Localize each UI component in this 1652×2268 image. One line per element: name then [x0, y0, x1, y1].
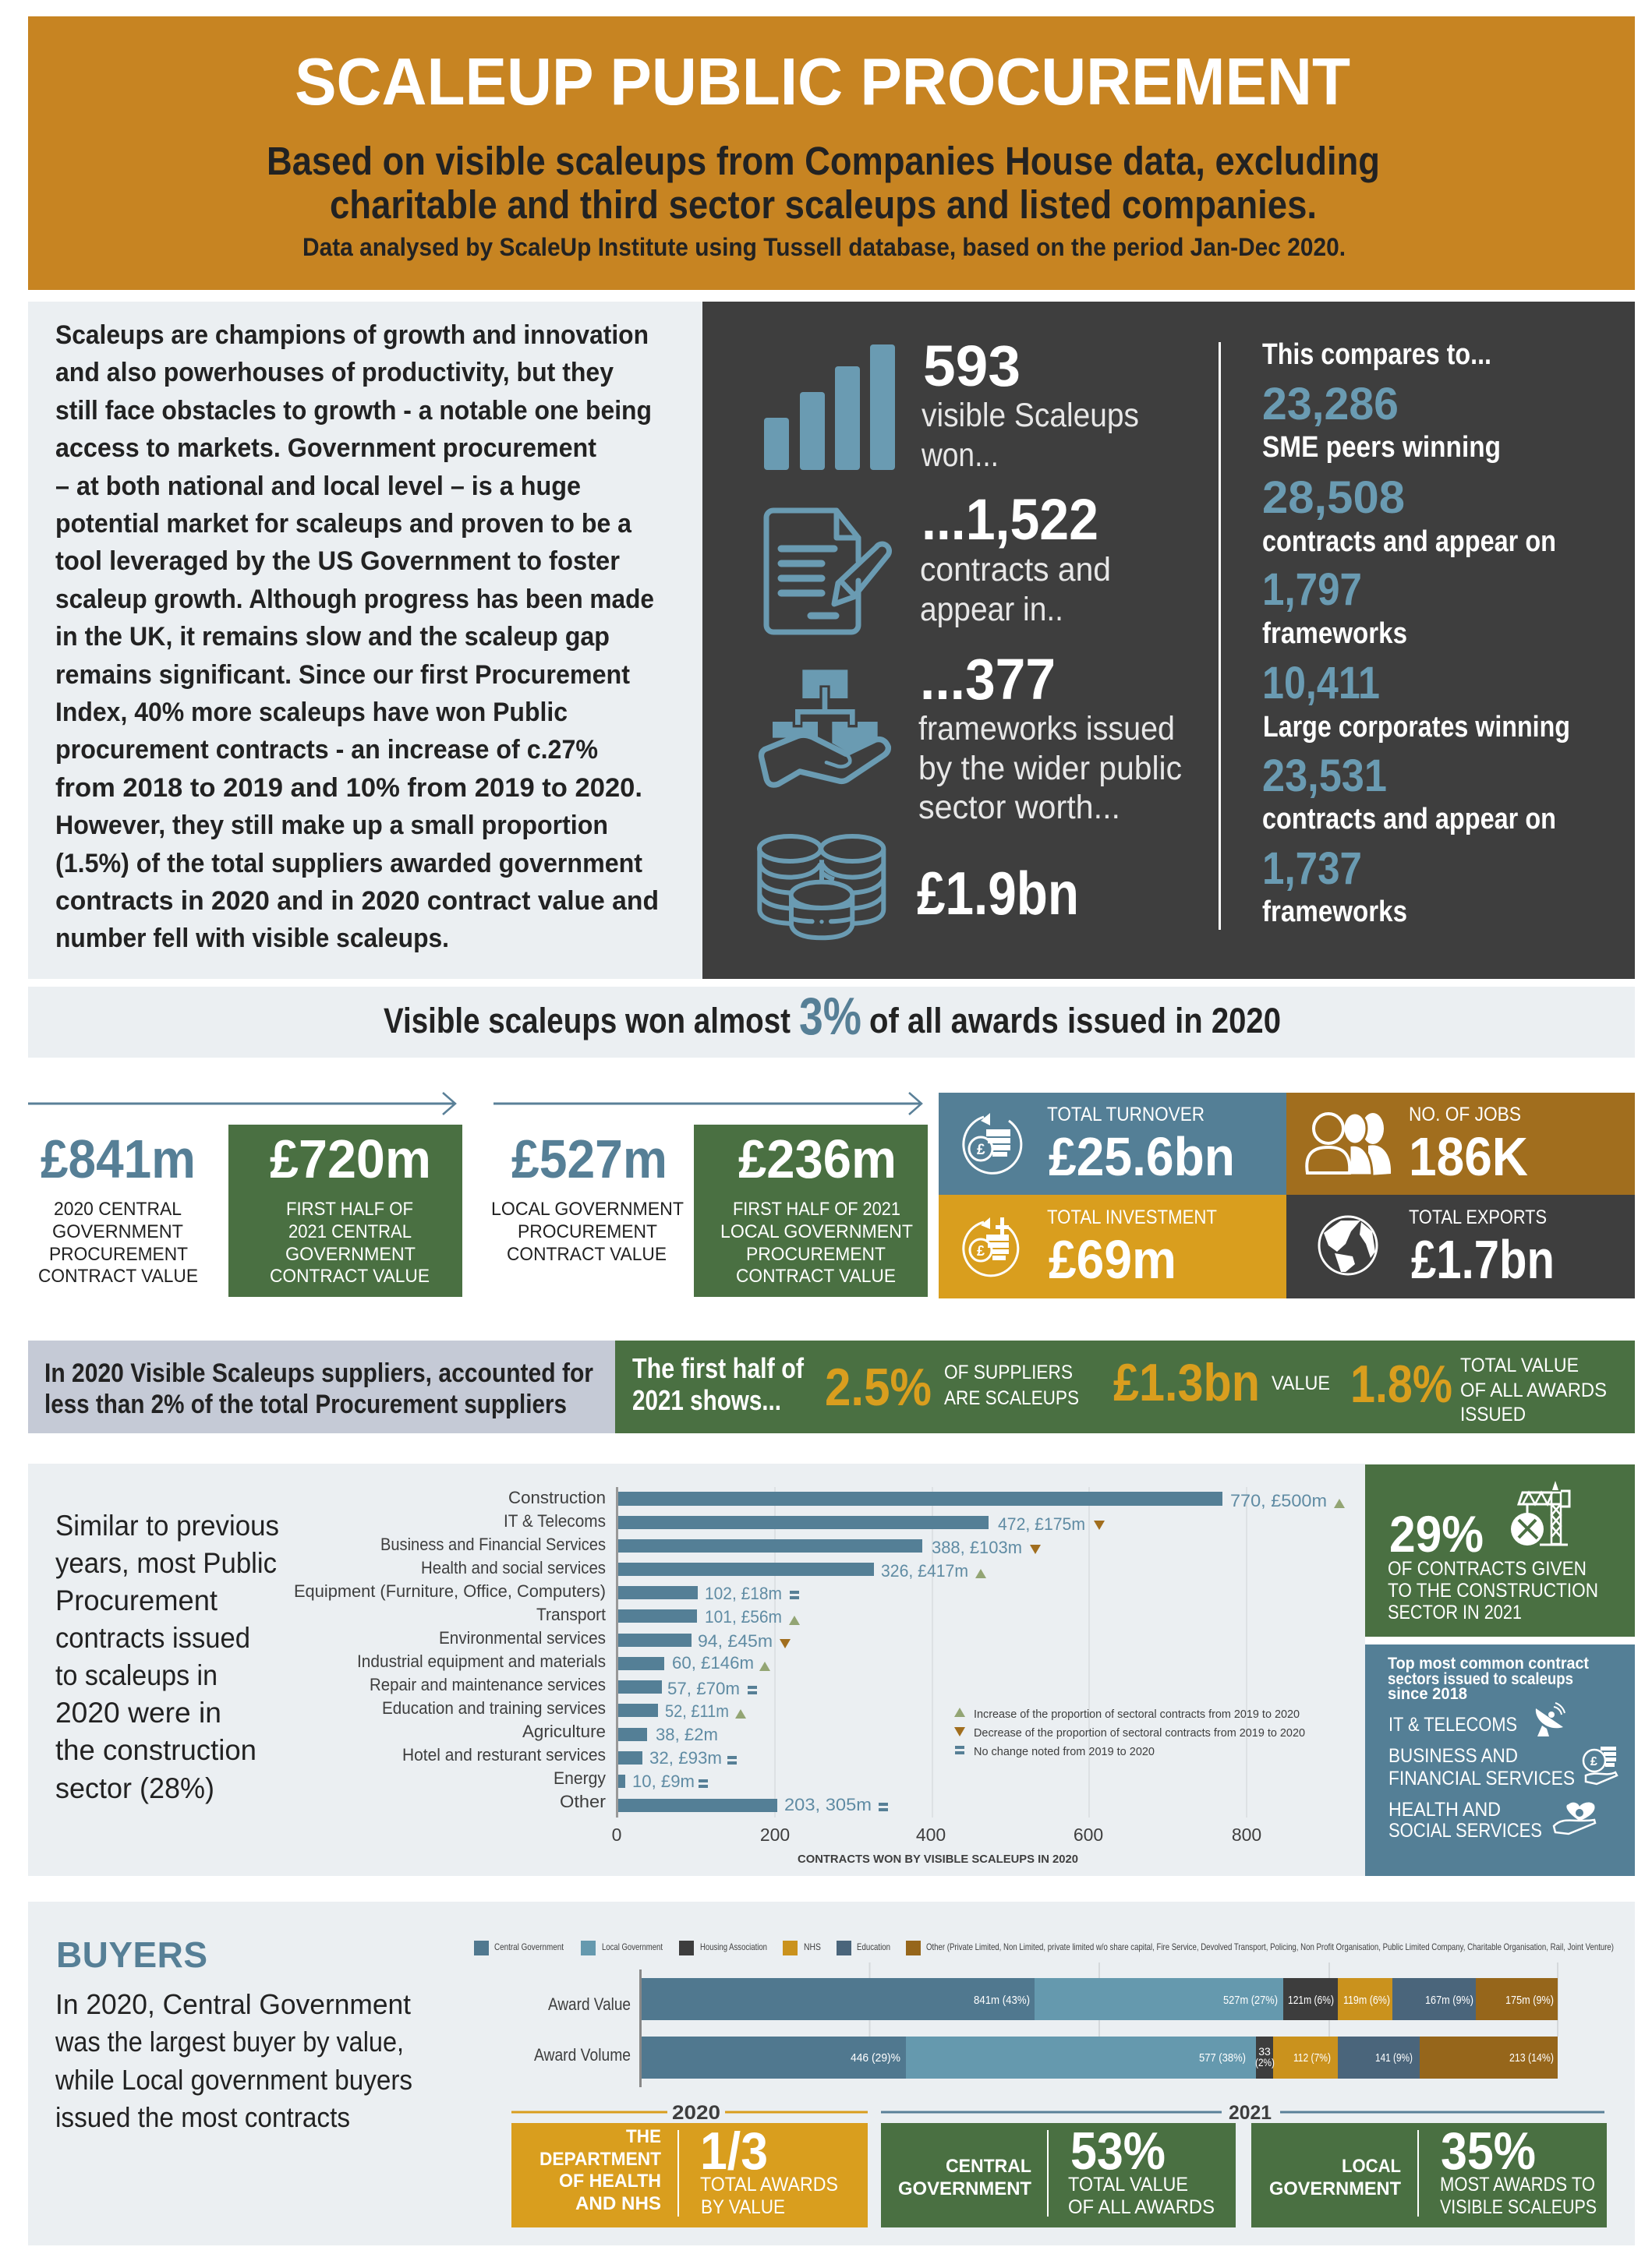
band: suppliers share: In 2020 Visible Scaleups suppliers, accounted for: [44, 1358, 593, 1388]
panel: top contract sectors: Top most common contract: [1388, 1655, 1589, 1673]
value labels: 101, £56m: [705, 1607, 782, 1627]
bar data labels: 446 (29)%: [851, 2051, 900, 2065]
bar data labels: 119m (6%): [1343, 1994, 1390, 2007]
bar: award volume: [640, 2037, 1558, 2079]
callout: department of health and NHS: [511, 2121, 868, 2227]
title: SCALEUP PUBLIC PROCUREMENT: [295, 45, 1350, 119]
value labels: 472, £175m: [998, 1514, 1085, 1534]
callout: local government: [1251, 2121, 1607, 2227]
callout: department of health and NHS: THE: [626, 2126, 661, 2147]
value labels: 38, £2m: [656, 1725, 718, 1744]
axis tick labels: 800: [1232, 1825, 1261, 1845]
value labels: 52, £11m: [665, 1701, 729, 1721]
stat: 527m local government: £527m: [511, 1129, 667, 1189]
tile: number of jobs: [1286, 1093, 1635, 1195]
panel: introduction text: number fell with visible scaleups.: [55, 924, 449, 953]
panel: top contract sectors: HEALTH AND: [1388, 1799, 1501, 1821]
panel: introduction text: procurement contracts - an increase of c.27%: [55, 735, 598, 765]
panel: top contract sectors: IT & TELECOMS: [1388, 1714, 1517, 1736]
header banner: [28, 16, 1635, 290]
chart legend: Increase of the proportion of sectoral contracts from 2019 to 2020: [974, 1708, 1300, 1721]
tile: number of jobs: 186K: [1409, 1126, 1528, 1187]
text: buyers summary: In 2020, Central Government: [55, 1988, 411, 2020]
stat: 236m first half local: LOCAL GOVERNMENT: [720, 1221, 913, 1242]
stat: 527m local government: [491, 1129, 684, 1265]
callout: central government: GOVERNMENT: [898, 2178, 1031, 2199]
callout: local government: LOCAL: [1342, 2156, 1401, 2177]
text: comparison column: frameworks: [1262, 617, 1407, 650]
callout: central government: CENTRAL: [946, 2156, 1031, 2177]
panel: introduction text: from 2018 to 2019 and 10% from 2019 to 2020.: [55, 773, 642, 803]
chart legend: buyer types: Local Government: [602, 1941, 663, 1952]
category labels: Construction: [508, 1488, 606, 1507]
icon: globe: [1319, 1217, 1377, 1274]
panel: introduction text: contracts in 2020 and in 2020 contract value and: [55, 886, 659, 916]
bar data labels: 121m (6%): [1288, 1994, 1334, 2007]
bar data labels: [851, 1994, 1554, 2068]
chart legend: buyer types: [474, 1941, 1614, 1955]
stat: 841m central government: [38, 1129, 198, 1287]
category labels: IT & Telecoms: [504, 1511, 606, 1531]
text: sector summary: 2020 were in: [55, 1697, 221, 1729]
stat: 236m first half local: FIRST HALF OF 2021: [733, 1199, 900, 1220]
category labels: Equipment (Furniture, Office, Computers): [294, 1581, 606, 1601]
icon: database stacks: [759, 836, 883, 938]
banner: share of awards: of all awards issued in 2020: [869, 1001, 1281, 1040]
band: suppliers share: less than 2% of the total Procurement suppliers: [44, 1390, 567, 1419]
chart legend: buyer types: Housing Association: [700, 1941, 767, 1952]
banner: share of awards: Visible scaleups won almost: [384, 1001, 791, 1040]
tile: total turnover: £25.6bn: [1049, 1126, 1235, 1187]
panel: introduction text: [28, 302, 702, 979]
text: comparison column: contracts and appear on: [1262, 803, 1556, 835]
panel: introduction text: in the UK, it remains slow and the scaleup gap: [55, 622, 610, 652]
axis title: CONTRACTS WON BY VISIBLE SCALEUPS IN 2020: [798, 1853, 1078, 1866]
panel: construction 29%: TO THE CONSTRUCTION: [1388, 1580, 1598, 1602]
subtitle: charitable and third sector scaleups and listed companies.: [330, 182, 1317, 227]
callout: central government: TOTAL VALUE: [1068, 2174, 1188, 2196]
text: comparison column: This compares to...: [1262, 338, 1491, 371]
row labels: Award Value: [548, 1994, 631, 2014]
tile: total exports: [1286, 1195, 1635, 1298]
text: comparison column: 1,797: [1262, 564, 1362, 615]
text: comparison column: Large corporates winning: [1263, 711, 1570, 744]
band: first half of 2021: 2021 shows...: [632, 1384, 781, 1416]
stat: 720m first half central: £720m: [270, 1129, 431, 1189]
stat: 841m central government: 2020 CENTRAL: [54, 1199, 182, 1220]
category labels: Energy: [554, 1768, 606, 1788]
icon: investment coins: [964, 1217, 1018, 1276]
value labels: [632, 1491, 1327, 1814]
band: first half of 2021: [615, 1341, 1635, 1433]
value labels: 94, £45m: [698, 1631, 773, 1651]
year heading: 2021: 2021: [1229, 2102, 1272, 2124]
bar data labels: 141 (9%): [1375, 2051, 1413, 2065]
trend markers: [699, 1499, 1345, 1811]
text: 377 frameworks: sector worth...: [918, 789, 1120, 826]
text: 1,522 contracts: ...1,522: [922, 487, 1098, 552]
panel: introduction text: – at both national and local level – is a huge: [55, 472, 581, 501]
stat: 841m central government: CONTRACT VALUE: [38, 1266, 198, 1287]
stat: 720m first half central: FIRST HALF OF: [286, 1199, 413, 1220]
panel: top contract sectors: since 2018: [1388, 1685, 1467, 1703]
text: 593 scaleups: visible Scaleups: [922, 397, 1139, 434]
tile: total turnover: [939, 1093, 1286, 1195]
chart legend: No change noted from 2019 to 2020: [974, 1745, 1155, 1758]
bar data labels: 213 (14%): [1509, 2051, 1554, 2065]
value labels: 770, £500m: [1230, 1491, 1327, 1510]
panel: introduction text: remains significant. Since our first Procurement: [55, 660, 630, 690]
text: buyers summary: [55, 1988, 412, 2133]
text: sector summary: the construction: [55, 1734, 256, 1766]
text: sector summary: Similar to previous: [55, 1510, 279, 1542]
band: first half of 2021: ARE SCALEUPS: [944, 1387, 1079, 1409]
text: sector summary: [55, 1510, 279, 1804]
category labels: Environmental services: [439, 1628, 606, 1648]
icon: heart in hand: [1554, 1802, 1595, 1834]
panel: introduction text: access to markets. Government procurement: [55, 433, 596, 463]
text: 377 frameworks: ...377: [920, 647, 1056, 712]
subtitle: [267, 139, 1380, 261]
icon: bar chart: [764, 344, 895, 470]
text: sector summary: Procurement: [55, 1584, 218, 1616]
callout: local government: 35%: [1441, 2121, 1536, 2181]
band: suppliers share: [28, 1341, 615, 1433]
text: sector summary: years, most Public: [55, 1547, 277, 1579]
stat: 236m first half local: £236m: [738, 1129, 897, 1189]
text: comparison column: 1,737: [1262, 843, 1362, 894]
stat: 527m local government: CONTRACT VALUE: [507, 1244, 667, 1265]
callout: department of health and NHS: BY VALUE: [701, 2196, 785, 2218]
banner: share of awards: 3%: [799, 987, 861, 1046]
text: sector summary: to scaleups in: [55, 1659, 218, 1691]
row labels: [534, 1994, 631, 2065]
panel: introduction text: (1.5%) of the total suppliers awarded government: [55, 849, 642, 878]
icon: people: [1307, 1113, 1391, 1175]
callout: central government: OF ALL AWARDS: [1068, 2196, 1215, 2218]
band: first half of 2021: OF SUPPLIERS: [944, 1362, 1073, 1383]
icon: investment coins: £: [977, 1243, 985, 1259]
icon: satellite dish: [1536, 1703, 1565, 1736]
text: buyers summary: while Local government buyers: [55, 2064, 412, 2096]
text: comparison column: 10,411: [1262, 658, 1380, 708]
text: comparison column: 23,531: [1262, 751, 1387, 801]
bar data labels: 841m (43%): [974, 1994, 1030, 2007]
panel: key figures: [702, 302, 1635, 979]
panel: introduction text: still face obstacles to growth - a notable one being: [55, 396, 652, 426]
stat: 527m local government: PROCUREMENT: [518, 1221, 657, 1242]
panel: top contract sectors: BUSINESS AND: [1388, 1745, 1518, 1767]
axis tick labels: 200: [760, 1825, 790, 1845]
panel: introduction text: Index, 40% more scaleups have won Public: [55, 698, 568, 727]
stat: 720m first half central: GOVERNMENT: [285, 1244, 416, 1265]
year heading: 2020: 2020: [672, 2102, 720, 2124]
text: buyers summary: was the largest buyer by value,: [55, 2026, 404, 2058]
stacked bar chart: award value and volume: [534, 1962, 1558, 2087]
axis tick labels: 0: [612, 1825, 621, 1845]
panel: top contract sectors: [1365, 1644, 1635, 1876]
band: first half of 2021: 1.8%: [1350, 1355, 1452, 1414]
chart legend: buyer types: NHS: [804, 1941, 821, 1952]
text: 593 scaleups: 593: [923, 334, 1021, 398]
category labels: Other: [560, 1792, 606, 1811]
panel: construction 29%: SECTOR IN 2021: [1388, 1602, 1522, 1623]
banner: share of awards: [28, 987, 1635, 1058]
callout: central government: [881, 2121, 1236, 2227]
bar data labels: 175m (9%): [1505, 1994, 1554, 2007]
icon: document and pen: [766, 510, 890, 632]
chart legend: [954, 1708, 1305, 1758]
chart legend: buyer types: Central Government: [494, 1941, 564, 1952]
subtitle: Based on visible scaleups from Companies House data, excluding: [267, 139, 1380, 183]
row labels: Award Volume: [534, 2045, 631, 2065]
category labels: Business and Financial Services: [380, 1535, 606, 1554]
chart legend: buyer types: Education: [857, 1941, 890, 1952]
subtitle: Data analysed by ScaleUp Institute using Tussell database, based on the period Jan-Dec 2020.: [302, 233, 1346, 261]
stat: 720m first half central: CONTRACT VALUE: [270, 1266, 430, 1287]
value labels: 32, £93m: [649, 1748, 722, 1768]
category labels: Education and training services: [382, 1698, 606, 1718]
text: buyers summary: issued the most contracts: [55, 2101, 350, 2133]
category labels: Agriculture: [522, 1722, 606, 1741]
tile: total investment: TOTAL INVESTMENT: [1047, 1206, 1217, 1228]
callout: local government: VISIBLE SCALEUPS: [1440, 2196, 1597, 2218]
category labels: Transport: [536, 1605, 606, 1624]
text: 593 scaleups: won...: [921, 436, 999, 474]
tile: total turnover: TOTAL TURNOVER: [1047, 1104, 1205, 1125]
value labels: 203, 305m: [784, 1795, 872, 1814]
band: first half of 2021: £1.3bn: [1113, 1353, 1260, 1412]
text: comparison column: [1262, 338, 1570, 928]
text: 1,522 contracts: appear in..: [920, 591, 1063, 628]
category labels: Hotel and resturant services: [402, 1745, 606, 1765]
axis tick labels: 400: [916, 1825, 946, 1845]
text: 1,522 contracts: contracts and: [920, 551, 1111, 588]
text: 1.9bn value: £1.9bn: [917, 859, 1079, 927]
icon: coins in hand: [1583, 1747, 1617, 1784]
panel: buyers: [28, 1902, 1635, 2245]
stat: 720m first half central: 2021 CENTRAL: [288, 1221, 412, 1242]
band: first half of 2021: ISSUED: [1460, 1404, 1526, 1425]
callout: department of health and NHS: AND NHS: [575, 2193, 661, 2214]
callout: central government: 53%: [1070, 2121, 1166, 2181]
heading: buyers: BUYERS: [56, 1934, 207, 1975]
callout: local government: GOVERNMENT: [1269, 2178, 1401, 2199]
text: 1,522 contracts: [920, 487, 1111, 628]
text: comparison column: frameworks: [1262, 896, 1407, 928]
tile: total exports: TOTAL EXPORTS: [1409, 1206, 1547, 1228]
value labels: 388, £103m: [932, 1538, 1022, 1557]
value labels: 10, £9m: [632, 1772, 695, 1791]
text: comparison column: 23,286: [1262, 379, 1399, 429]
icon: turnover coins: £: [977, 1142, 985, 1158]
axis tick labels: [612, 1825, 1261, 1845]
callout: department of health and NHS: DEPARTMENT: [539, 2149, 661, 2170]
value labels: 326, £417m: [881, 1561, 968, 1581]
icon: crane and tools: [1511, 1481, 1569, 1546]
category labels: Repair and maintenance services: [370, 1675, 606, 1694]
band: first half of 2021: TOTAL VALUE: [1460, 1355, 1579, 1376]
text: 377 frameworks: by the wider public: [918, 750, 1182, 787]
tile: total investment: [939, 1195, 1286, 1298]
panel: construction 29%: 29%: [1389, 1505, 1484, 1563]
band: first half of 2021: 2.5%: [825, 1358, 932, 1417]
band: first half of 2021: OF ALL AWARDS: [1460, 1380, 1607, 1401]
arrow: local government: [493, 1093, 922, 1115]
value labels: 57, £70m: [667, 1679, 740, 1698]
panel: top contract sectors: FINANCIAL SERVICES: [1388, 1768, 1575, 1789]
bar chart: contracts by sector: [294, 1487, 1345, 1866]
bar data labels: 167m (9%): [1425, 1994, 1473, 2007]
icon: hand with boxes: [761, 669, 888, 785]
stat: 236m first half local: PROCUREMENT: [746, 1244, 886, 1265]
text: 377 frameworks: frameworks issued: [918, 710, 1175, 747]
callout: local government: MOST AWARDS TO: [1440, 2174, 1595, 2196]
text: 377 frameworks: [918, 647, 1182, 826]
bars: [617, 1492, 1222, 1812]
text: sector summary: sector (28%): [55, 1772, 214, 1804]
panel: top contract sectors: SOCIAL SERVICES: [1388, 1820, 1542, 1842]
stat: 841m central government: PROCUREMENT: [49, 1244, 188, 1265]
stat: 236m first half local: CONTRACT VALUE: [736, 1266, 896, 1287]
icon: turnover coins: [964, 1113, 1021, 1173]
text: comparison column: contracts and appear on: [1262, 525, 1556, 558]
bar data labels: 33: [1258, 2045, 1271, 2058]
panel: top contract sectors: sectors issued to scaleups: [1388, 1670, 1573, 1688]
panel: introduction text: potential market for scaleups and proven to be a: [55, 509, 632, 539]
panel: introduction text: and also powerhouses of productivity, but they: [55, 358, 614, 387]
bar data labels: 577 (38%): [1199, 2051, 1246, 2065]
chart legend: Decrease of the proportion of sectoral contracts from 2019 to 2020: [974, 1726, 1305, 1740]
bar data labels: (2%): [1255, 2056, 1275, 2068]
text: comparison column: 28,508: [1262, 472, 1405, 523]
band: first half of 2021: The first half of: [632, 1352, 805, 1384]
stat: 236m first half local: [694, 1125, 928, 1297]
text: comparison column: SME peers winning: [1262, 431, 1501, 464]
value labels: 60, £146m: [672, 1653, 754, 1673]
panel: construction 29%: OF CONTRACTS GIVEN: [1388, 1558, 1587, 1580]
icon: coins in hand: £: [1590, 1755, 1597, 1768]
category labels: [294, 1488, 606, 1811]
callout: department of health and NHS: OF HEALTH: [559, 2171, 661, 2192]
band: first half of 2021: VALUE: [1272, 1372, 1330, 1394]
stat: 841m central government: £841m: [41, 1129, 196, 1189]
panel: introduction text: scaleup growth. Although progress has been made: [55, 585, 654, 614]
bar: award value: [640, 1978, 1558, 2020]
stat: 527m local government: LOCAL GOVERNMENT: [491, 1199, 684, 1220]
text: sector summary: contracts issued: [55, 1622, 250, 1654]
tile: total exports: £1.7bn: [1411, 1229, 1555, 1290]
arrow: central government: [28, 1093, 455, 1115]
stat: 720m first half central: [228, 1125, 462, 1297]
callout: department of health and NHS: TOTAL AWARDS: [700, 2174, 838, 2196]
bar data labels: 527m (27%): [1223, 1994, 1278, 2007]
panel: introduction text: However, they still make up a small proportion: [55, 811, 608, 840]
stat: 841m central government: GOVERNMENT: [52, 1221, 183, 1242]
panel: introduction text: tool leveraged by the US Government to foster: [55, 546, 620, 576]
bar data labels: 112 (7%): [1293, 2051, 1331, 2065]
category labels: Industrial equipment and materials: [357, 1652, 606, 1671]
text: 593 scaleups: [921, 334, 1139, 474]
panel: introduction text: Scaleups are champions of growth and innovation: [55, 320, 649, 350]
axis tick labels: 600: [1074, 1825, 1103, 1845]
panel: construction 29%: [1365, 1464, 1635, 1637]
value labels: 102, £18m: [705, 1584, 782, 1603]
panel: sector chart: [28, 1464, 1365, 1876]
category labels: Health and social services: [421, 1558, 606, 1577]
tile: number of jobs: NO. OF JOBS: [1409, 1104, 1521, 1125]
tile: total investment: £69m: [1049, 1229, 1176, 1290]
callout: department of health and NHS: 1/3: [700, 2121, 768, 2181]
